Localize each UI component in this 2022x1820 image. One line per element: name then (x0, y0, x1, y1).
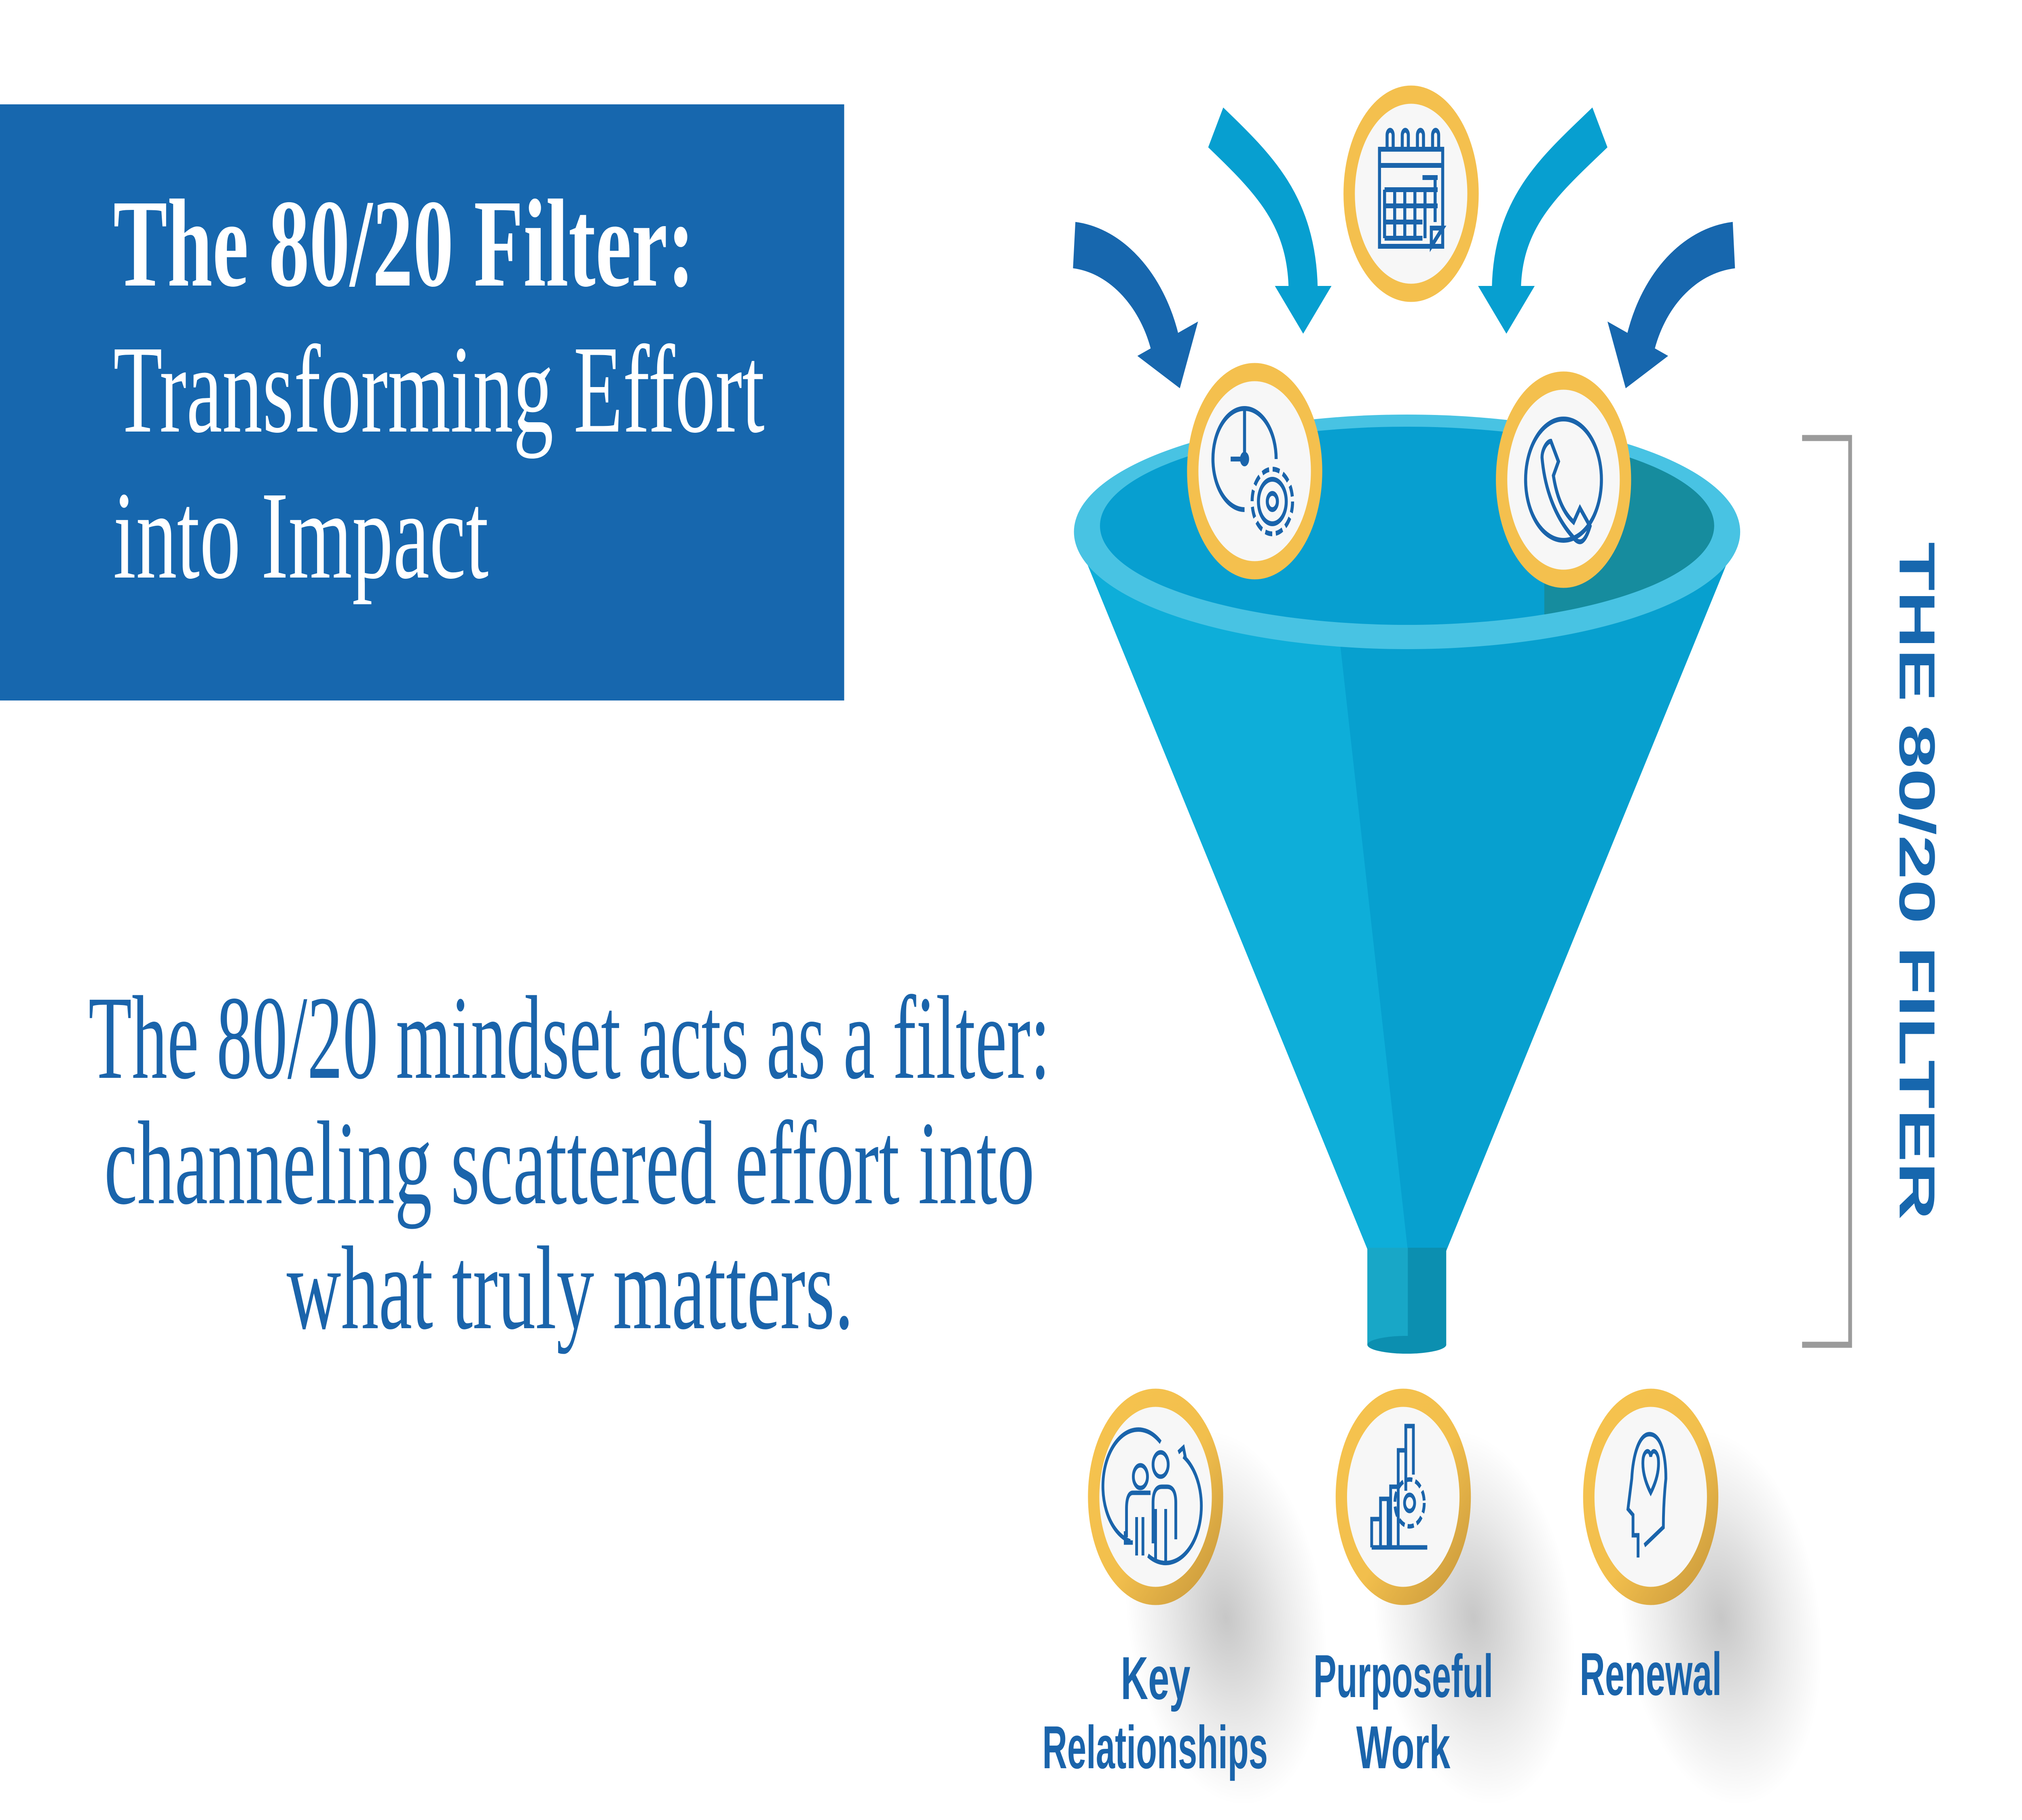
subtitle text block: channeling scattered effort into (104, 1098, 1034, 1230)
subtitle text block (89, 972, 1050, 1354)
icon: calendar (1349, 95, 1473, 293)
icon: phone (1502, 381, 1625, 579)
label: purposeful work (1313, 1642, 1493, 1781)
label: key relationships (1043, 1644, 1268, 1781)
label: purposeful work: Purposeful (1313, 1642, 1493, 1710)
title text: The 80/20 Filter: (113, 174, 695, 313)
bracket (1802, 438, 1850, 1345)
label: key relationships: Key (1121, 1644, 1190, 1712)
label: purposeful work: Work (1356, 1713, 1451, 1781)
arrow: outer left (1074, 245, 1198, 388)
title text: into Impact (113, 466, 489, 605)
output: purposeful work (1313, 1377, 1612, 1820)
label: renewal: Renewal (1580, 1640, 1722, 1708)
title text: Transforming Effort (113, 320, 765, 459)
vertical label: THE 80/20 FILTER (1889, 542, 1945, 1220)
icon: head with heart (1589, 1398, 1713, 1596)
funnel (1074, 415, 1741, 1354)
output: key relationships (1043, 1377, 1364, 1820)
subtitle text block: what truly matters. (287, 1223, 854, 1354)
arrow: outer right (1607, 245, 1734, 388)
icon: people (1093, 1398, 1218, 1596)
label: key relationships: Relationships (1043, 1713, 1268, 1781)
spout (1367, 1248, 1446, 1354)
title panel (0, 104, 844, 700)
arrow: inner left (1216, 127, 1331, 334)
subtitle text block: The 80/20 mindset acts as a filter: (89, 972, 1050, 1104)
arrow: inner right (1478, 127, 1600, 334)
icon: clock with gear (1193, 372, 1317, 570)
icon: chart with gear (1341, 1398, 1465, 1596)
title text (113, 174, 765, 605)
output: renewal (1580, 1377, 1859, 1820)
